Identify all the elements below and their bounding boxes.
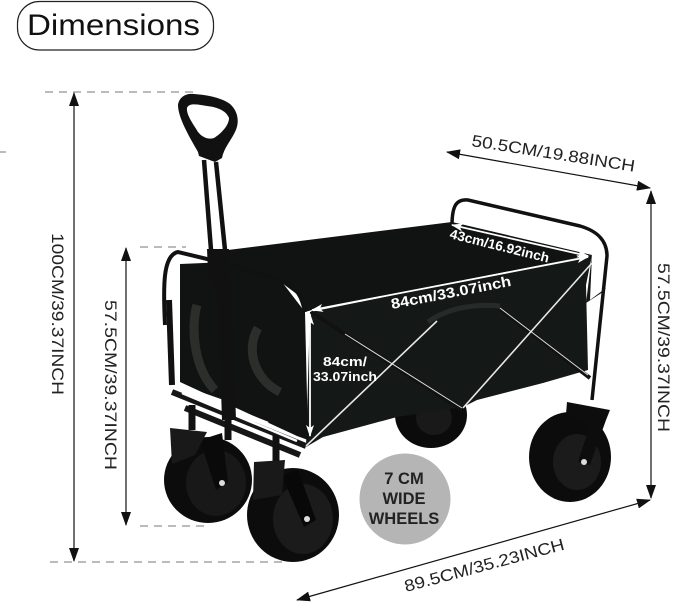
dimension: length: 89.5CM/35.23INCH [402, 536, 566, 596]
inner labels [313, 226, 551, 384]
dimension: basket height: 57.5CM/39.37INCH [101, 300, 119, 470]
heading: Dimensions [18, 2, 214, 50]
wagon front panel [306, 255, 592, 447]
rear right wheel [529, 402, 611, 502]
back wheel [395, 382, 467, 448]
badge: 7 CM wide wheels: WHEELS [369, 510, 439, 528]
badge: 7 CM wide wheels [360, 454, 450, 544]
wagon [164, 94, 611, 562]
front right wheel [247, 460, 339, 562]
inner labels: 84cm/ [323, 354, 367, 369]
wagon inner fabric [228, 222, 592, 312]
handle [178, 94, 238, 420]
dimension: right height: 57.5CM/39.37INCH [654, 263, 672, 432]
heading: Dimensions: Dimensions [27, 9, 200, 42]
rear frame rail [452, 200, 607, 400]
dimension: depth [447, 132, 650, 188]
inner labels: 33.07inch [313, 369, 377, 384]
side panel [180, 262, 308, 440]
cross braces [311, 309, 590, 410]
dimension: total height: 100CM/39.37INCH [48, 233, 66, 395]
inner measurement arrows [310, 225, 588, 436]
inner labels: 43cm/16.92inch [448, 226, 551, 266]
base frame [172, 392, 306, 455]
side frame rail [164, 252, 305, 325]
badge: 7 CM wide wheels: WIDE [382, 490, 426, 508]
badge: 7 CM wide wheels: 7 CM [384, 470, 424, 488]
inner labels: 84cm/33.07inch [390, 274, 513, 313]
fabric handle strap [428, 305, 500, 322]
dimension: length [297, 500, 650, 600]
dimension: depth: 50.5CM/19.88INCH [470, 132, 636, 176]
front left wheel [164, 428, 252, 523]
